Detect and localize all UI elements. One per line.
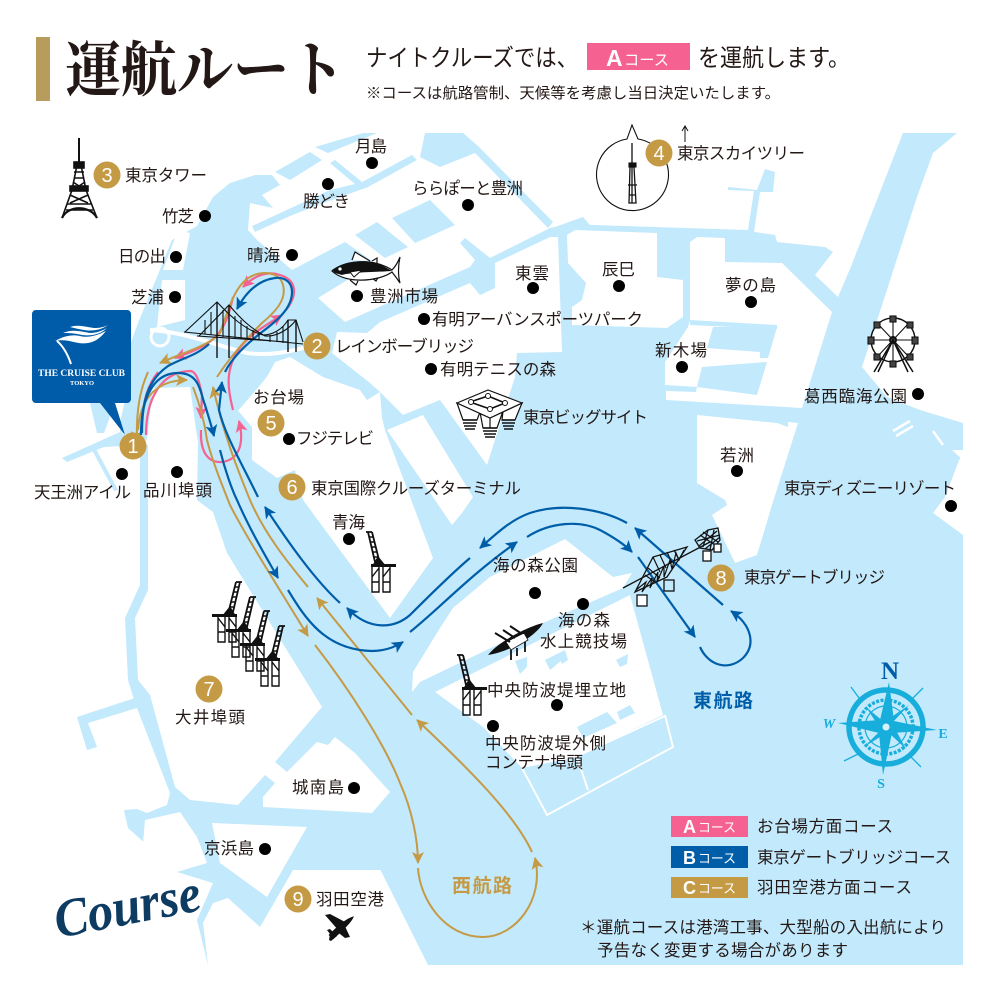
icon: cranes at Oi pier [212,582,285,686]
icon: crane at central breakwater [457,655,487,715]
icon: Ferris wheel [868,316,918,372]
place label: Shinagawa Pier: 品川埠頭 [143,481,212,500]
place label: Shinkiba [655,341,707,373]
icon: Big Sight [457,390,522,437]
numbered marker 1: pier: 1 [127,436,139,458]
numbered marker 8: Tokyo Gate Bridge: 8 [715,568,727,590]
place label: Central Breakwater Landfill: 中央防波堤埋立地 [487,681,626,700]
numbered marker 7: Oi Pier: 7 [203,679,215,701]
place label: Jonanjima: 城南島 [292,778,344,797]
place label: Tokyo Big Sight: 東京ビッグサイト [523,408,648,427]
numbered marker 6: Tokyo International Cruise Terminal [278,474,521,500]
numbered marker 2: Rainbow Bridge: 2 [311,336,323,358]
place label: Shinonome: 東雲 [515,264,549,283]
place label: Fuji TV: フジテレビ [296,429,374,448]
place label: Harumi [247,246,298,265]
title: 運航ルート [65,38,345,104]
footnote [580,918,946,960]
place label: Yumenoshima [725,276,776,308]
numbered marker 3: Tokyo Tower: 東京タワー [125,166,207,185]
legend: C course: 羽田空港方面コース [757,878,912,897]
icon: compass rose: S [877,777,885,792]
place label: Outer Central Breakwater Container Terminal: 中央防波堤外側 [485,734,606,753]
icon: compass rose: N [881,658,899,685]
place label: Aomi: 青海 [332,513,366,532]
place label: Shibaura [131,288,181,307]
subtitle: night cruise course: を運航します。 [698,45,850,72]
place label: LaLaport Toyosu: ららぽーと豊洲 [412,179,523,198]
numbered marker 5: Odaiba [258,410,284,436]
icon: Rainbow Bridge [184,302,303,358]
place label: Hinode: 日の出 [118,247,166,266]
subtitle: night cruise course [366,43,850,72]
place label: Sea Forest Waterway: 水上競技場 [540,632,627,651]
routes: course B blue [141,278,750,665]
place label: Tokyo Disney Resort: 東京ディズニーリゾート [784,478,956,498]
place label: Shinkiba: 新木場 [655,341,707,360]
place label: Harumi: 晴海 [247,246,280,265]
icon: rowing boat [488,623,543,660]
numbered marker 4: Tokyo Skytree: 4 [653,143,665,165]
title accent bar [36,37,50,101]
place label: Keihinjima: 京浜島 [204,839,254,858]
place label: Kasai Rinkai Park: 葛西臨海公園 [804,387,907,406]
numbered marker 7: Oi Pier [196,676,222,702]
place label: Ariake Urban Sports Park: 有明アーバンスポーツパーク [432,310,643,329]
place label: Takeshiba [162,207,211,226]
numbered marker 9: Haneda Airport [284,886,384,912]
badge: A course [587,43,690,71]
place label: Tsukishima: 月島 [355,137,387,156]
place label: Yumenoshima: 夢の島 [725,276,776,295]
route label: west: 西航路 [452,875,512,897]
numbered marker 3: Tokyo Tower [94,162,207,188]
place label: Umi-no-Mori Park: 海の森公園 [493,556,578,575]
place label: Aomi [332,513,366,545]
numbered marker 8: Tokyo Gate Bridge: 東京ゲートブリッジ [744,567,885,587]
logo panel: The Cruise Club Tokyo: TOKYO [70,381,94,387]
legend: A course: A [683,817,696,837]
place label: Umi-no-Mori Park [493,556,578,599]
icon: airplane [325,914,352,941]
legend: A course: コース [698,820,736,835]
logo panel: The Cruise Club Tokyo [32,310,131,435]
place label: Tokyo Disney Resort [784,478,957,512]
place label: Takeshiba: 竹芝 [162,207,194,226]
subtitle note: ※コースは航路管制、天候等を考慮し当日決定いたします。 [366,84,780,102]
place label: Shibaura: 芝浦 [131,288,164,307]
numbered marker 6: Tokyo International Cruise Terminal: 東京国際クルーズターミナル [311,479,521,498]
script heading: Course: Course [49,863,206,950]
map: canals and inlets [62,133,777,965]
legend: C course [671,877,912,898]
place label: Tatsumi [602,261,635,292]
icon: Tokyo Gate Bridge [623,528,721,606]
legend: C course: コース [698,881,736,896]
numbered marker 2: Rainbow Bridge [304,332,474,360]
numbered marker 4: Tokyo Skytree [646,140,805,166]
numbered marker 4: Tokyo Skytree: 東京スカイツリー [677,144,805,163]
logo panel: The Cruise Club Tokyo: THE CRUISE CLUB [38,369,126,379]
arrow: toward Skytree [682,126,688,142]
place label: Wakasu: 若洲 [720,446,754,465]
numbered marker 1: pier [120,432,146,460]
routes: course C gold [137,273,537,937]
legend: C course: C [683,878,696,898]
place label: Shinagawa Pier [143,466,212,500]
route label: east: 東航路 [693,690,753,712]
place label: Tatsumi: 辰巳 [602,261,635,279]
legend: B course: コース [698,851,736,866]
numbered marker 8: Tokyo Gate Bridge [708,564,885,592]
legend: B course: 東京ゲートブリッジコース [757,847,951,867]
map: seawall, road and pier outlines [150,328,943,815]
legend [671,816,951,898]
icon: Skytree bubble [596,125,669,211]
place label: Wakasu [720,446,754,477]
numbered marker 9: Haneda Airport: 羽田空港 [316,890,384,909]
place label: Sea Forest Waterway [540,598,627,651]
legend: B course [671,846,951,868]
map: water base [120,133,963,965]
legend: A course [671,816,893,837]
place label: LaLaport Toyosu [412,179,523,211]
icon: crane at Aomi [366,532,396,592]
place label: Kachidoki: 勝どき [303,192,350,211]
legend: B course: B [683,848,696,868]
map: islands inside the southern canal [143,450,963,897]
place label: Kachidoki [303,178,350,211]
place label: Tsukishima [355,137,387,169]
place label: Tennozu Isle: 天王洲アイル [34,484,131,502]
place label: Ariake Tennis Forest: 有明テニスの森 [440,360,556,379]
numbered marker 3: Tokyo Tower: 3 [101,165,113,187]
place label: Sea Forest Waterway: 海の森 [558,611,610,630]
place label: Tennozu Isle [34,468,131,502]
numbered marker 5: Odaiba: 5 [265,413,277,435]
icon: Tokyo Tower [62,138,97,218]
subtitle: night cruise course: ナイトクルーズでは、 [366,45,578,72]
icon: compass rose: W [823,717,837,732]
place label: Outer Central Breakwater Container Terminal: コンテナ埠頭 [485,753,584,772]
badge: A course: コース [624,52,669,69]
legend: A course: お台場方面コース [757,817,893,836]
place label: Oi Pier: 大井埠頭 [175,708,246,727]
numbered marker 9: Haneda Airport: 9 [292,889,304,911]
numbered marker 6: Tokyo International Cruise Terminal: 6 [286,477,298,499]
numbered marker 2: Rainbow Bridge: レインボーブリッジ [335,336,474,356]
place label: Outer Central Breakwater Container Terminal [485,720,606,772]
place label: Central Breakwater Landfill [487,681,626,711]
place label: Shinonome [515,264,549,294]
place label: Toyosu Market: 豊洲市場 [370,287,438,306]
routes: course A pink [143,273,294,462]
icon: compass rose [823,658,948,792]
footnote: 予告なく変更する場合があります [597,941,848,960]
footnote: ＊運航コースは港湾工事、大型船の入出航により [580,918,946,937]
badge: A course: A [606,45,623,71]
place label: Odaiba: お台場 [253,388,304,407]
icon: compass rose: E [938,727,948,742]
icon: tuna [332,252,400,285]
